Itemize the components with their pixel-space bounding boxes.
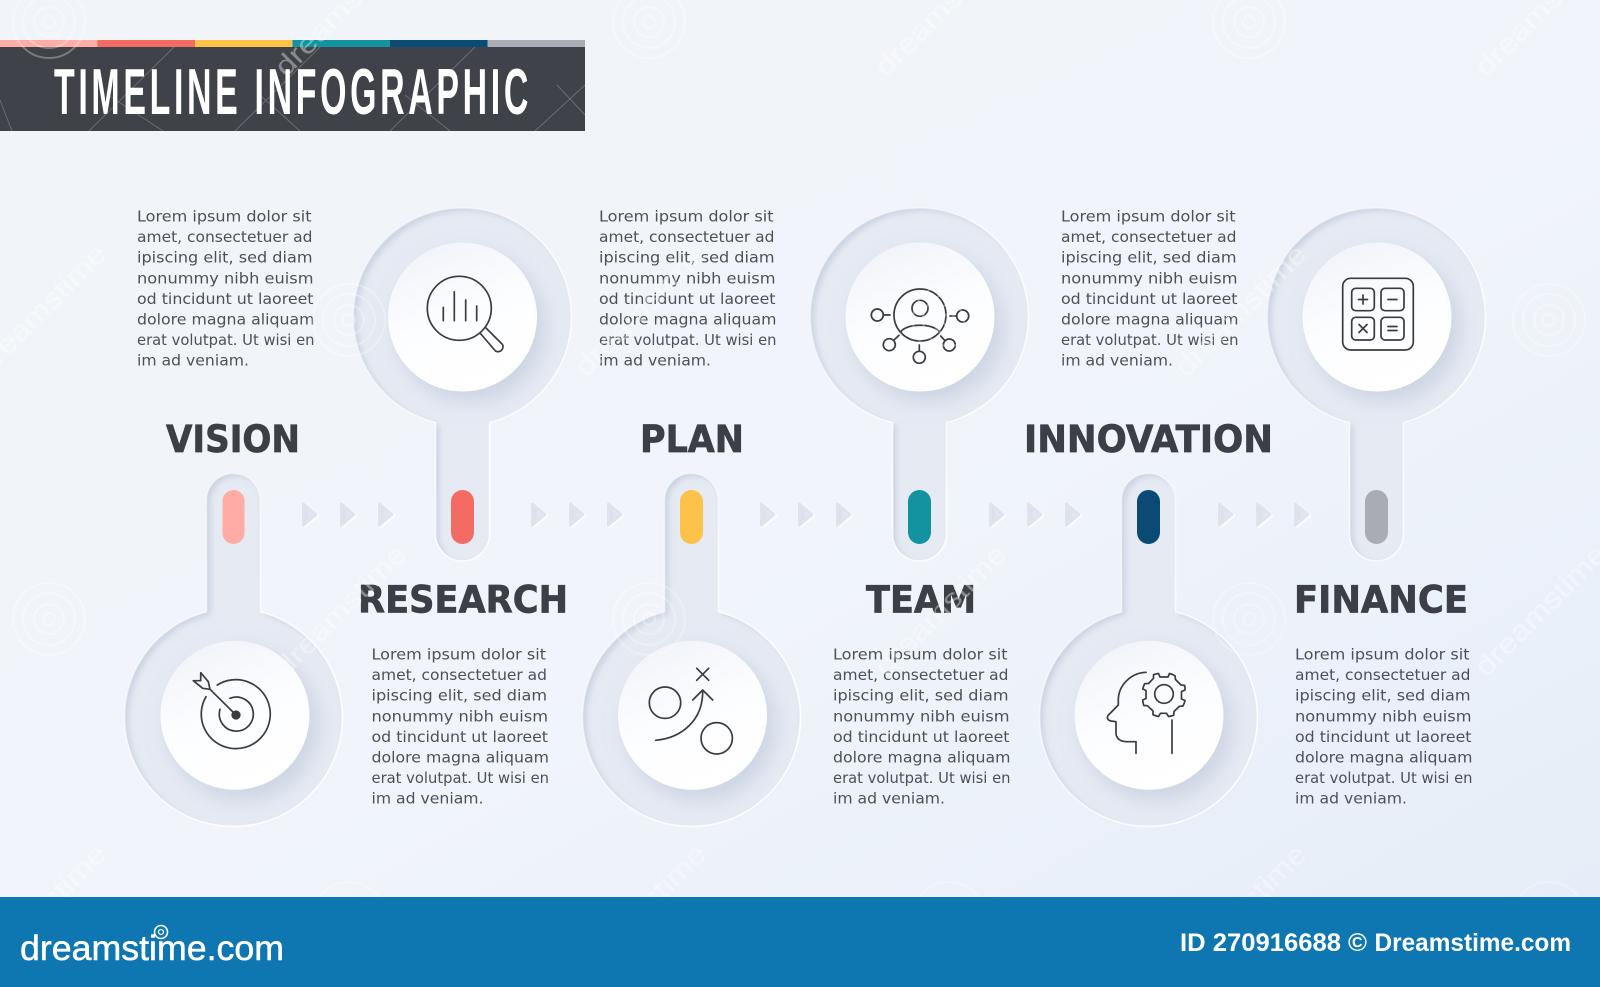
research disc: [388, 242, 537, 392]
text block: research: amet, consectetuer ad: [372, 666, 547, 684]
text block: team: [833, 646, 1010, 808]
team disc: [846, 242, 994, 392]
text block: vision: erat volutpat. Ut wisi en: [137, 331, 314, 349]
text block: research: dolore magna aliquam: [372, 748, 549, 766]
watermark overlay: dreamstime: [1168, 238, 1313, 382]
footer credit: ©: [1348, 929, 1368, 957]
arrows: research to plan: [532, 504, 621, 525]
text block: team: im ad veniam.: [833, 790, 945, 808]
text block: research: nonummy nibh euism: [372, 707, 548, 725]
text block: innovation: erat volutpat. Ut wisi en: [1061, 331, 1238, 349]
text block: finance: Lorem ipsum dolor sit: [1295, 646, 1470, 664]
innovation marker pill: [1137, 490, 1160, 544]
footer bar: [0, 897, 1600, 987]
colour strip: [0, 40, 585, 47]
text block: finance: im ad veniam.: [1295, 790, 1407, 808]
text block: plan: amet, consectetuer ad: [599, 228, 774, 246]
icon: team network: [871, 289, 969, 363]
heading: research: RESEARCH: [358, 578, 568, 622]
icon: calculator: [1343, 278, 1413, 350]
text block: team: ipiscing elit, sed diam: [833, 687, 1008, 705]
heading: vision: VISION: [166, 418, 300, 461]
text block: finance: ipiscing elit, sed diam: [1295, 687, 1470, 705]
text block: finance: nonummy nibh euism: [1295, 707, 1472, 725]
icon: magnifier chart: [427, 276, 503, 352]
text block: finance: erat volutpat. Ut wisi en: [1295, 769, 1472, 787]
text block: innovation: nonummy nibh euism: [1061, 269, 1238, 287]
team marker pill: [908, 490, 931, 544]
text block: research: ipiscing elit, sed diam: [372, 687, 547, 705]
watermark overlay: dreamstime: [1168, 838, 1313, 982]
plan disc: [618, 641, 767, 790]
title text: TIMELINE INFOGRAPHIC: [54, 55, 532, 128]
watermark overlay: dreamstime: [868, 538, 1013, 682]
title banner: [0, 40, 585, 131]
text block: research: [372, 646, 549, 808]
heading: finance: FINANCE: [1294, 578, 1468, 622]
panel: research: [354, 208, 572, 561]
text block: vision: im ad veniam.: [137, 352, 249, 370]
panel: finance: [1267, 208, 1486, 561]
finance disc: [1302, 242, 1452, 392]
text block: research: erat volutpat. Ut wisi en: [372, 769, 549, 787]
panel: plan: [582, 474, 800, 826]
watermark overlay: dreamstime: [268, 538, 413, 682]
watermark overlay: dreamstime: [1468, 538, 1600, 682]
text block: plan: od tincidunt ut laoreet: [599, 290, 776, 308]
watermark overlay: dreamstime: [568, 238, 713, 382]
text block: plan: erat volutpat. Ut wisi en: [599, 331, 776, 349]
text block: finance: amet, consectetuer ad: [1295, 666, 1470, 684]
text block: team: Lorem ipsum dolor sit: [833, 646, 1008, 664]
heading: team: TEAM: [866, 578, 976, 622]
text block: team: dolore magna aliquam: [833, 748, 1010, 766]
text block: plan: ipiscing elit, sed diam: [599, 249, 774, 267]
text block: plan: nonummy nibh euism: [599, 269, 776, 287]
vision marker pill: [222, 490, 244, 544]
text block: vision: amet, consectetuer ad: [137, 228, 312, 246]
panel: vision: [124, 474, 342, 826]
icon: strategy play: [649, 668, 732, 754]
heading: plan: PLAN: [640, 418, 744, 461]
text block: team: od tincidunt ut laoreet: [833, 728, 1010, 746]
text block: finance: dolore magna aliquam: [1295, 748, 1472, 766]
icon: head with gear: [1107, 672, 1185, 753]
footer credit: Dreamstime.com: [1374, 929, 1571, 957]
footer logo: dreamstime.com: [20, 929, 284, 968]
text block: vision: dolore magna aliquam: [137, 310, 314, 328]
vision disc: [160, 641, 310, 790]
text block: research: im ad veniam.: [372, 790, 484, 808]
arrows: plan to team: [762, 504, 850, 525]
text block: research: Lorem ipsum dolor sit: [372, 646, 546, 664]
research marker pill: [451, 490, 474, 544]
text block: innovation: Lorem ipsum dolor sit: [1061, 208, 1236, 226]
text block: vision: Lorem ipsum dolor sit: [137, 208, 312, 226]
text block: innovation: [1061, 208, 1238, 370]
text block: plan: Lorem ipsum dolor sit: [599, 208, 774, 226]
text block: vision: [137, 208, 314, 370]
text block: team: nonummy nibh euism: [833, 707, 1010, 725]
arrows: vision to research: [304, 504, 392, 525]
text block: team: erat volutpat. Ut wisi en: [833, 769, 1010, 787]
watermark overlay: dreamstime: [568, 838, 713, 982]
plan marker pill: [680, 490, 703, 544]
text block: innovation: im ad veniam.: [1061, 352, 1173, 370]
text block: innovation: dolore magna aliquam: [1061, 310, 1238, 328]
text block: innovation: ipiscing elit, sed diam: [1061, 249, 1236, 267]
text block: vision: od tincidunt ut laoreet: [137, 290, 314, 308]
heading: innovation: INNOVATION: [1024, 418, 1273, 461]
text block: plan: im ad veniam.: [599, 352, 711, 370]
text block: vision: ipiscing elit, sed diam: [137, 249, 312, 267]
text block: finance: od tincidunt ut laoreet: [1295, 728, 1472, 746]
text block: team: amet, consectetuer ad: [833, 666, 1008, 684]
text block: finance: [1295, 646, 1472, 808]
panel: innovation: [1040, 474, 1258, 826]
finance marker pill: [1365, 490, 1388, 544]
text block: plan: dolore magna aliquam: [599, 310, 776, 328]
icon: target: [193, 673, 270, 749]
footer credit: [1180, 929, 1571, 957]
text block: plan: [599, 208, 776, 370]
text block: research: od tincidunt ut laoreet: [372, 728, 548, 746]
text block: vision: nonummy nibh euism: [137, 269, 314, 287]
arrows: team to innovation: [990, 504, 1079, 525]
arrows: innovation to finance: [1220, 504, 1308, 525]
innovation disc: [1074, 641, 1224, 790]
panel: team: [810, 208, 1028, 561]
text block: innovation: amet, consectetuer ad: [1061, 228, 1236, 246]
text block: innovation: od tincidunt ut laoreet: [1061, 290, 1238, 308]
footer credit: ID 270916688: [1180, 929, 1341, 957]
